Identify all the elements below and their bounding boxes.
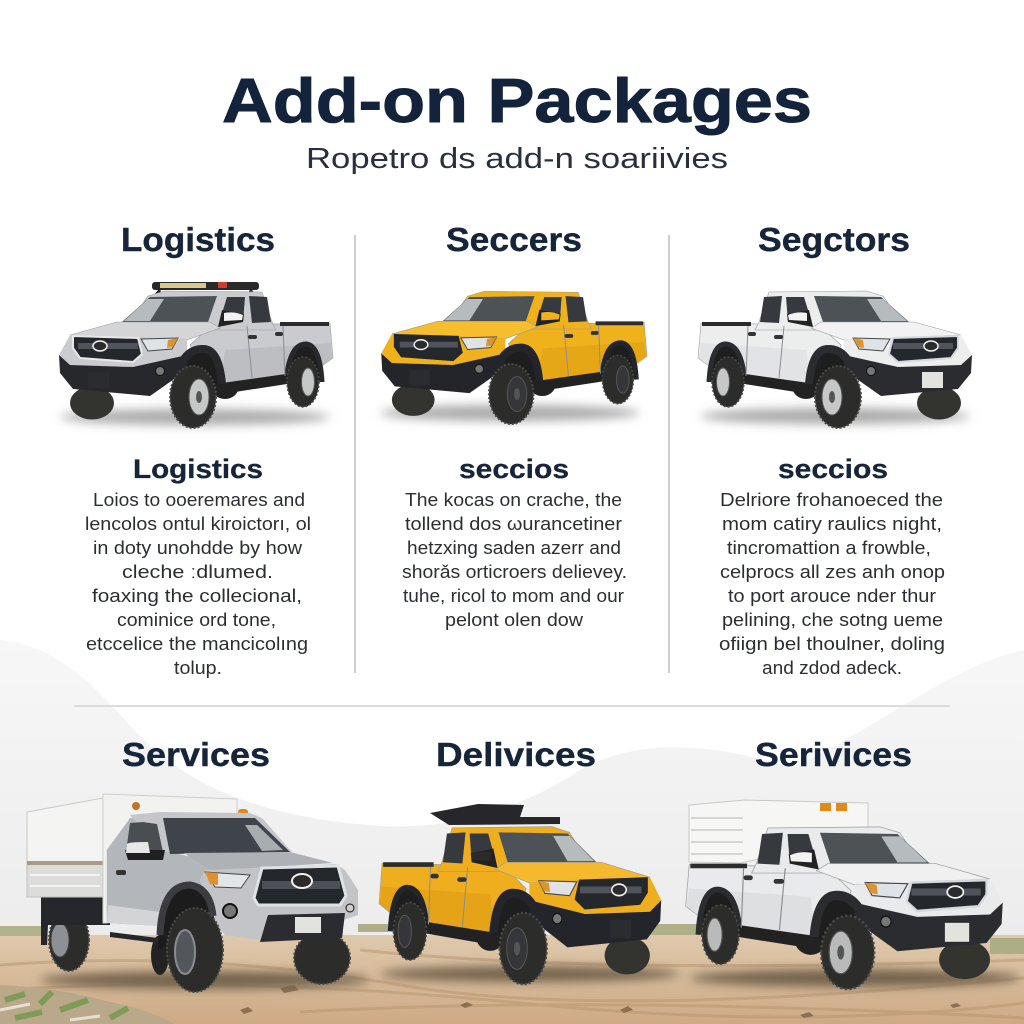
text block: logistics: tolup. (174, 658, 222, 678)
text block: logistics: foaxing the collecional, (92, 586, 302, 606)
text block: seccios: Delriore frohanoeced the (720, 490, 943, 510)
text block: seccios: tincromattion a frowble, (727, 538, 931, 558)
heading: segctors: Segctors (758, 221, 910, 258)
text block: logistics: in doty unohdde by how (93, 538, 303, 558)
truck: yellow pickup with roof rack (379, 804, 680, 984)
text block: seccios: tollend dos ωurancetiner (405, 514, 622, 534)
subheading: seccios: seccios (459, 454, 569, 484)
subtitle: Ropetro ds add-n soariivies (306, 143, 728, 175)
title: Add-on Packages (222, 67, 812, 136)
text block: seccios (402, 490, 627, 630)
text block: seccios: hetzxing saden azerr and (407, 538, 621, 558)
heading: logistics: Logistics (121, 221, 275, 258)
truck: silver utility truck with box body (27, 794, 370, 992)
text block: seccios: celprocs all zes anh onop (720, 562, 945, 582)
text block: seccios: to port arouce nder thur (728, 586, 936, 606)
subheading: logistics: Logistics (133, 454, 263, 484)
text block: seccios: mom catiry raulics night, (722, 514, 942, 534)
text block: seccios: pelining, che sotng ueme (722, 610, 943, 630)
text block: seccios: and zdod adeck. (762, 658, 902, 678)
panel: seccers (380, 221, 647, 630)
text block: seccios: tuhe, ricol to mom and our (403, 586, 624, 606)
truck: yellow pickup (380, 291, 647, 424)
heading: seccers: Seccers (446, 221, 582, 258)
background hills (0, 640, 1024, 940)
text block: seccios: The kocas on crache, the (405, 490, 622, 510)
panel: logistics (59, 221, 333, 678)
text block: seccios: shorǎs orticroers delievey. (402, 562, 627, 582)
subheading: seccios: seccios (778, 454, 888, 484)
truck: white pickup with canopy (686, 800, 1020, 989)
truck: white pickup (698, 291, 972, 428)
heading: services left: Services (122, 736, 270, 773)
text block: logistics: lencolos ontul kiroictorı, ol (85, 514, 311, 534)
truck: silver pickup with light bar (59, 282, 333, 428)
text block: seccios: pelont olen dow (445, 610, 584, 630)
heading: delivices: Delivices (436, 736, 596, 773)
text block: seccios: ofiign bel thoulner, doling (719, 634, 945, 654)
text block: logistics: Loios to ooeremares and (93, 490, 305, 510)
text block: logistics (85, 490, 311, 678)
text block: seccios (719, 490, 945, 678)
text block: logistics: cominice ord tone, (117, 610, 276, 630)
heading: serivices right: Serivices (755, 736, 912, 773)
text block: logistics: etccelice the mancicolıng (86, 634, 308, 654)
text block: logistics: cleche ːdlumed. (122, 562, 273, 582)
panel: segctors (698, 221, 972, 678)
ground (0, 924, 1024, 1024)
